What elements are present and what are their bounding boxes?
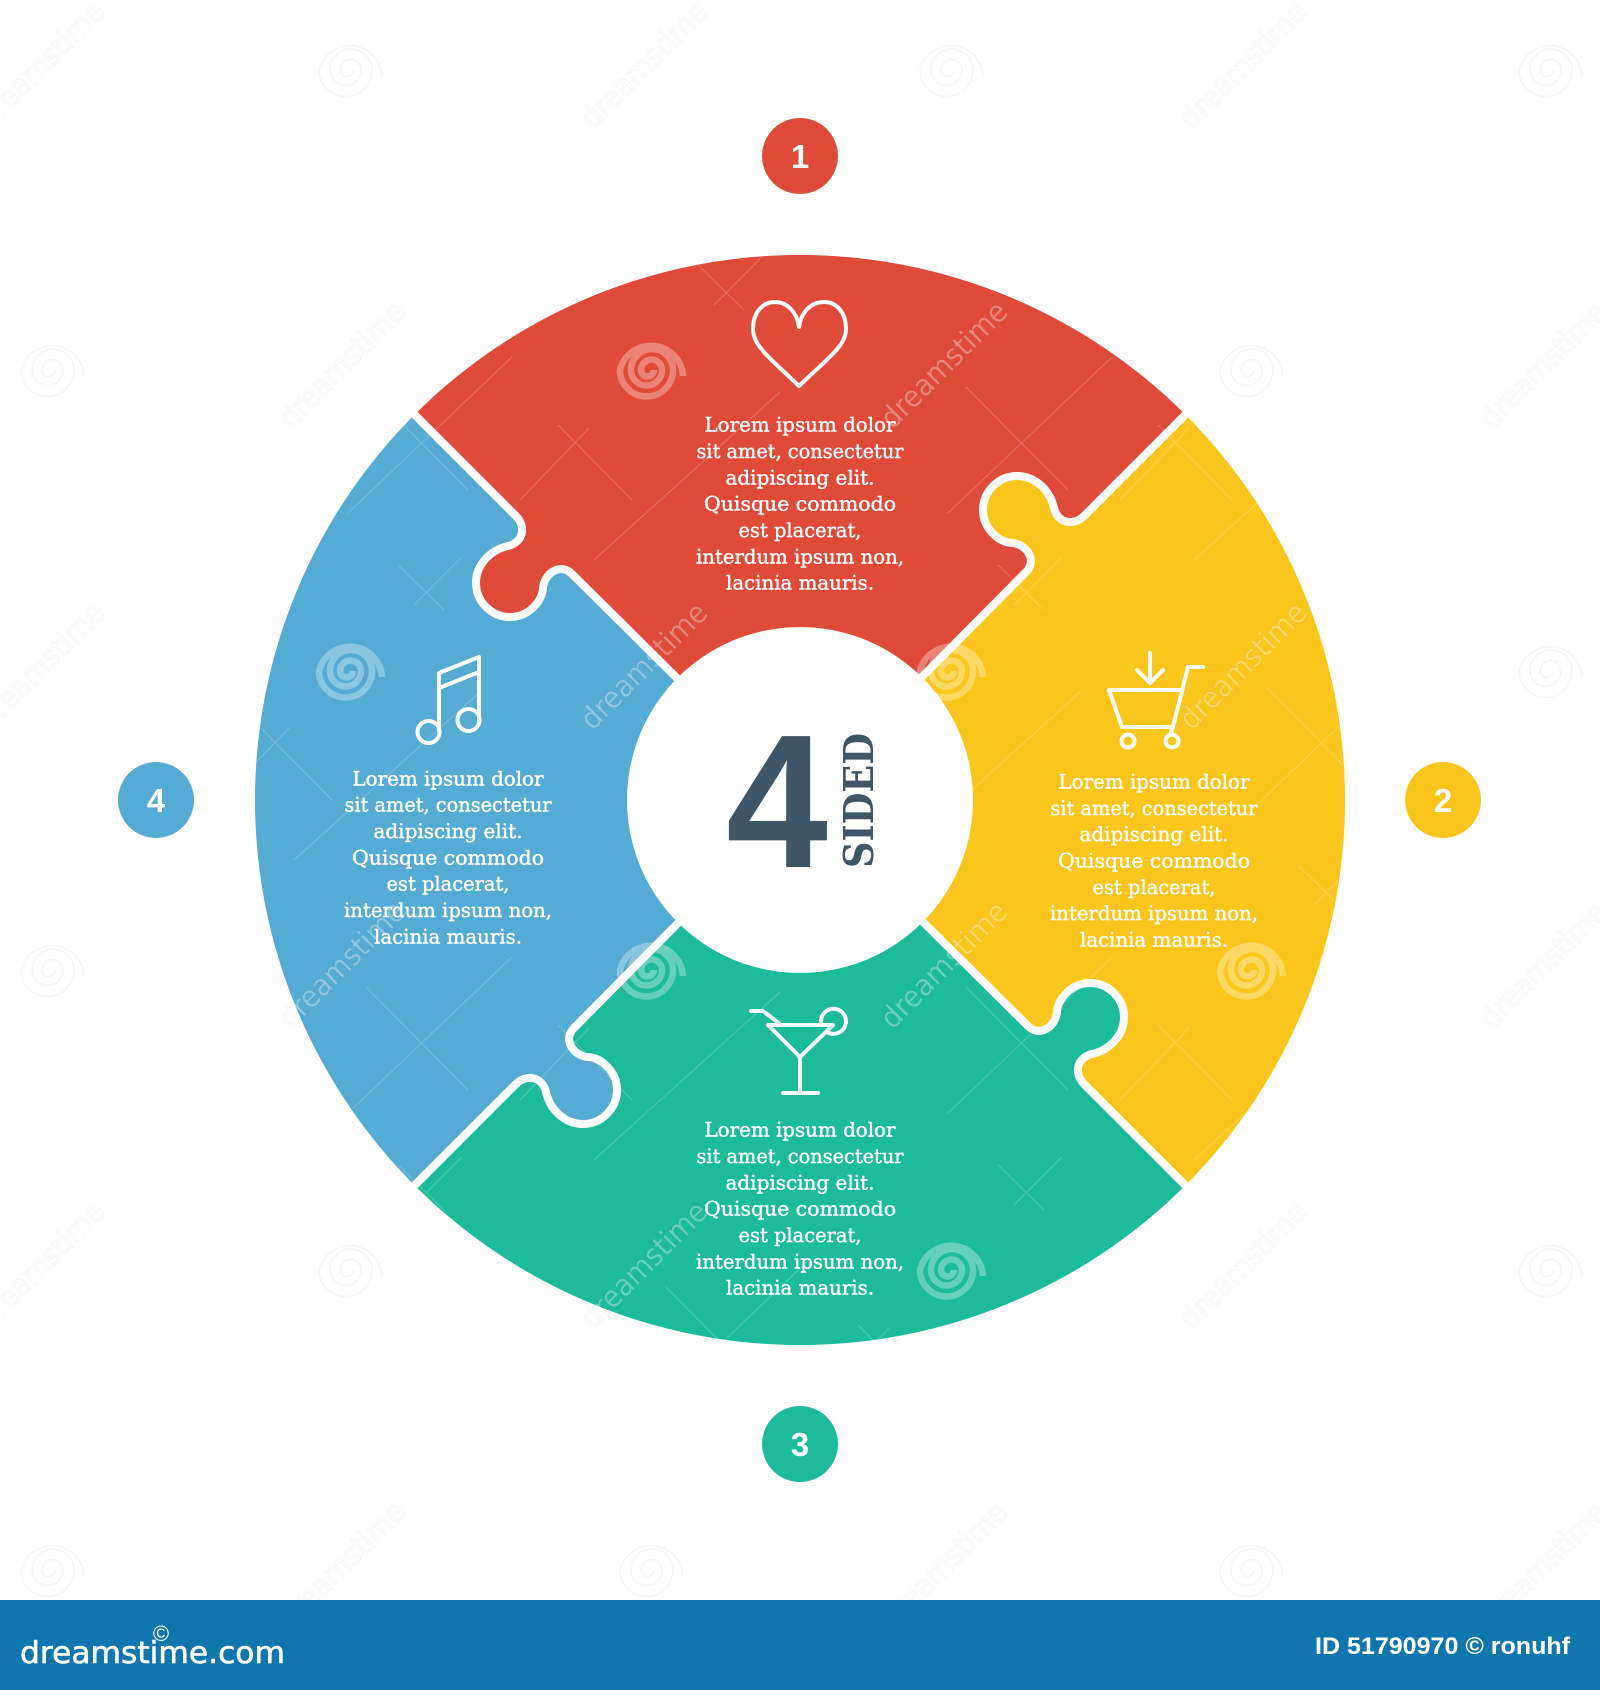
number badge 3: 3 bbox=[791, 1426, 809, 1463]
text block: blue piece: Quisque commodo bbox=[352, 845, 544, 869]
number badge 1: 1 bbox=[791, 138, 809, 175]
watermark wordmarks: dreamstime bbox=[272, 1495, 413, 1636]
watermark wordmarks: dreamstime bbox=[272, 895, 413, 1036]
text block: blue piece: lacinia mauris. bbox=[374, 924, 522, 948]
text block: green piece: Lorem ipsum dolor bbox=[704, 1118, 896, 1142]
text block: green piece: interdum ipsum non, bbox=[696, 1249, 904, 1273]
text block: yellow piece: Lorem ipsum dolor bbox=[1058, 770, 1250, 794]
center label: 4 sided bbox=[726, 695, 883, 908]
watermark wordmarks: dreamstime bbox=[874, 295, 1015, 436]
text block: blue piece bbox=[344, 766, 552, 948]
text block: red piece: adipiscing elit. bbox=[726, 465, 874, 489]
text block: yellow piece: adipiscing elit. bbox=[1080, 822, 1228, 846]
number badge 4 bbox=[118, 762, 194, 838]
text block: yellow piece bbox=[1050, 770, 1258, 952]
puzzle pieces bbox=[255, 255, 1345, 1345]
watermark wordmarks: dreamstime bbox=[874, 1495, 1015, 1636]
text block: red piece: lacinia mauris. bbox=[726, 571, 874, 595]
text block: blue piece: interdum ipsum non, bbox=[344, 898, 552, 922]
icon: shopping cart bbox=[1109, 653, 1203, 748]
text block: green piece: adipiscing elit. bbox=[726, 1170, 874, 1194]
icon: cocktail glass bbox=[751, 1009, 846, 1093]
center circle bbox=[627, 627, 973, 973]
watermark wordmarks: dreamstime bbox=[1173, 596, 1314, 737]
text block: red piece: Quisque commodo bbox=[704, 492, 896, 516]
piece 4: blue bbox=[255, 418, 676, 1182]
number badge 2 bbox=[1405, 762, 1481, 838]
text block: yellow piece: est placerat, bbox=[1092, 875, 1216, 899]
number badge 2: 2 bbox=[1434, 782, 1452, 819]
watermark wordmarks: dreamstime bbox=[574, 596, 715, 737]
piece 2: yellow bbox=[924, 418, 1345, 1182]
watermark wordmarks: dreamstime bbox=[874, 895, 1015, 1036]
faint watermark lattice lines bbox=[124, 126, 1344, 1340]
icon: heart bbox=[753, 302, 846, 386]
watermark wordmarks: dreamstime bbox=[574, 1195, 715, 1336]
piece 1: red bbox=[418, 255, 1182, 676]
text block: blue piece: Lorem ipsum dolor bbox=[352, 766, 544, 790]
text block: green piece: est placerat, bbox=[738, 1223, 862, 1247]
big numeral 4: 4 bbox=[726, 695, 828, 908]
watermark wordmarks: dreamstime bbox=[1173, 1195, 1314, 1336]
icon: music notes bbox=[418, 657, 480, 743]
text block: red piece: interdum ipsum non, bbox=[696, 544, 904, 568]
footer band bbox=[0, 1600, 1600, 1690]
footer logo text: dreamstime.com bbox=[20, 1636, 285, 1671]
text block: red piece: Lorem ipsum dolor bbox=[704, 413, 896, 437]
number badge 4: 4 bbox=[147, 782, 166, 819]
footer logo mark: © bbox=[153, 1621, 169, 1646]
rotated word SIDED: SIDED bbox=[835, 733, 883, 868]
text block: red piece bbox=[696, 413, 904, 595]
text block: blue piece: adipiscing elit. bbox=[374, 819, 522, 843]
text block: green piece: lacinia mauris. bbox=[726, 1276, 874, 1300]
text block: red piece: sit amet, consectetur bbox=[696, 439, 904, 463]
text block: yellow piece: sit amet, consectetur bbox=[1050, 796, 1258, 820]
watermark wordmarks: dreamstime bbox=[272, 295, 413, 436]
text block: green piece: Quisque commodo bbox=[704, 1197, 896, 1221]
text block: yellow piece: interdum ipsum non, bbox=[1050, 901, 1258, 925]
piece 3: green bbox=[418, 924, 1182, 1345]
text block: yellow piece: lacinia mauris. bbox=[1080, 928, 1228, 952]
text block: blue piece: sit amet, consectetur bbox=[344, 793, 552, 817]
white puzzle seams bbox=[408, 408, 1192, 1192]
text block: yellow piece: Quisque commodo bbox=[1058, 848, 1250, 872]
number badge 1 bbox=[762, 118, 838, 194]
puzzle wheel bbox=[255, 255, 1345, 1345]
text block: green piece bbox=[696, 1118, 904, 1300]
text block: red piece: est placerat, bbox=[738, 518, 862, 542]
text block: green piece: sit amet, consectetur bbox=[696, 1144, 904, 1168]
image id and credit: ID 51790970 © ronuhf bbox=[1315, 1633, 1571, 1660]
text block: blue piece: est placerat, bbox=[386, 872, 510, 896]
number badge 3 bbox=[762, 1406, 838, 1482]
